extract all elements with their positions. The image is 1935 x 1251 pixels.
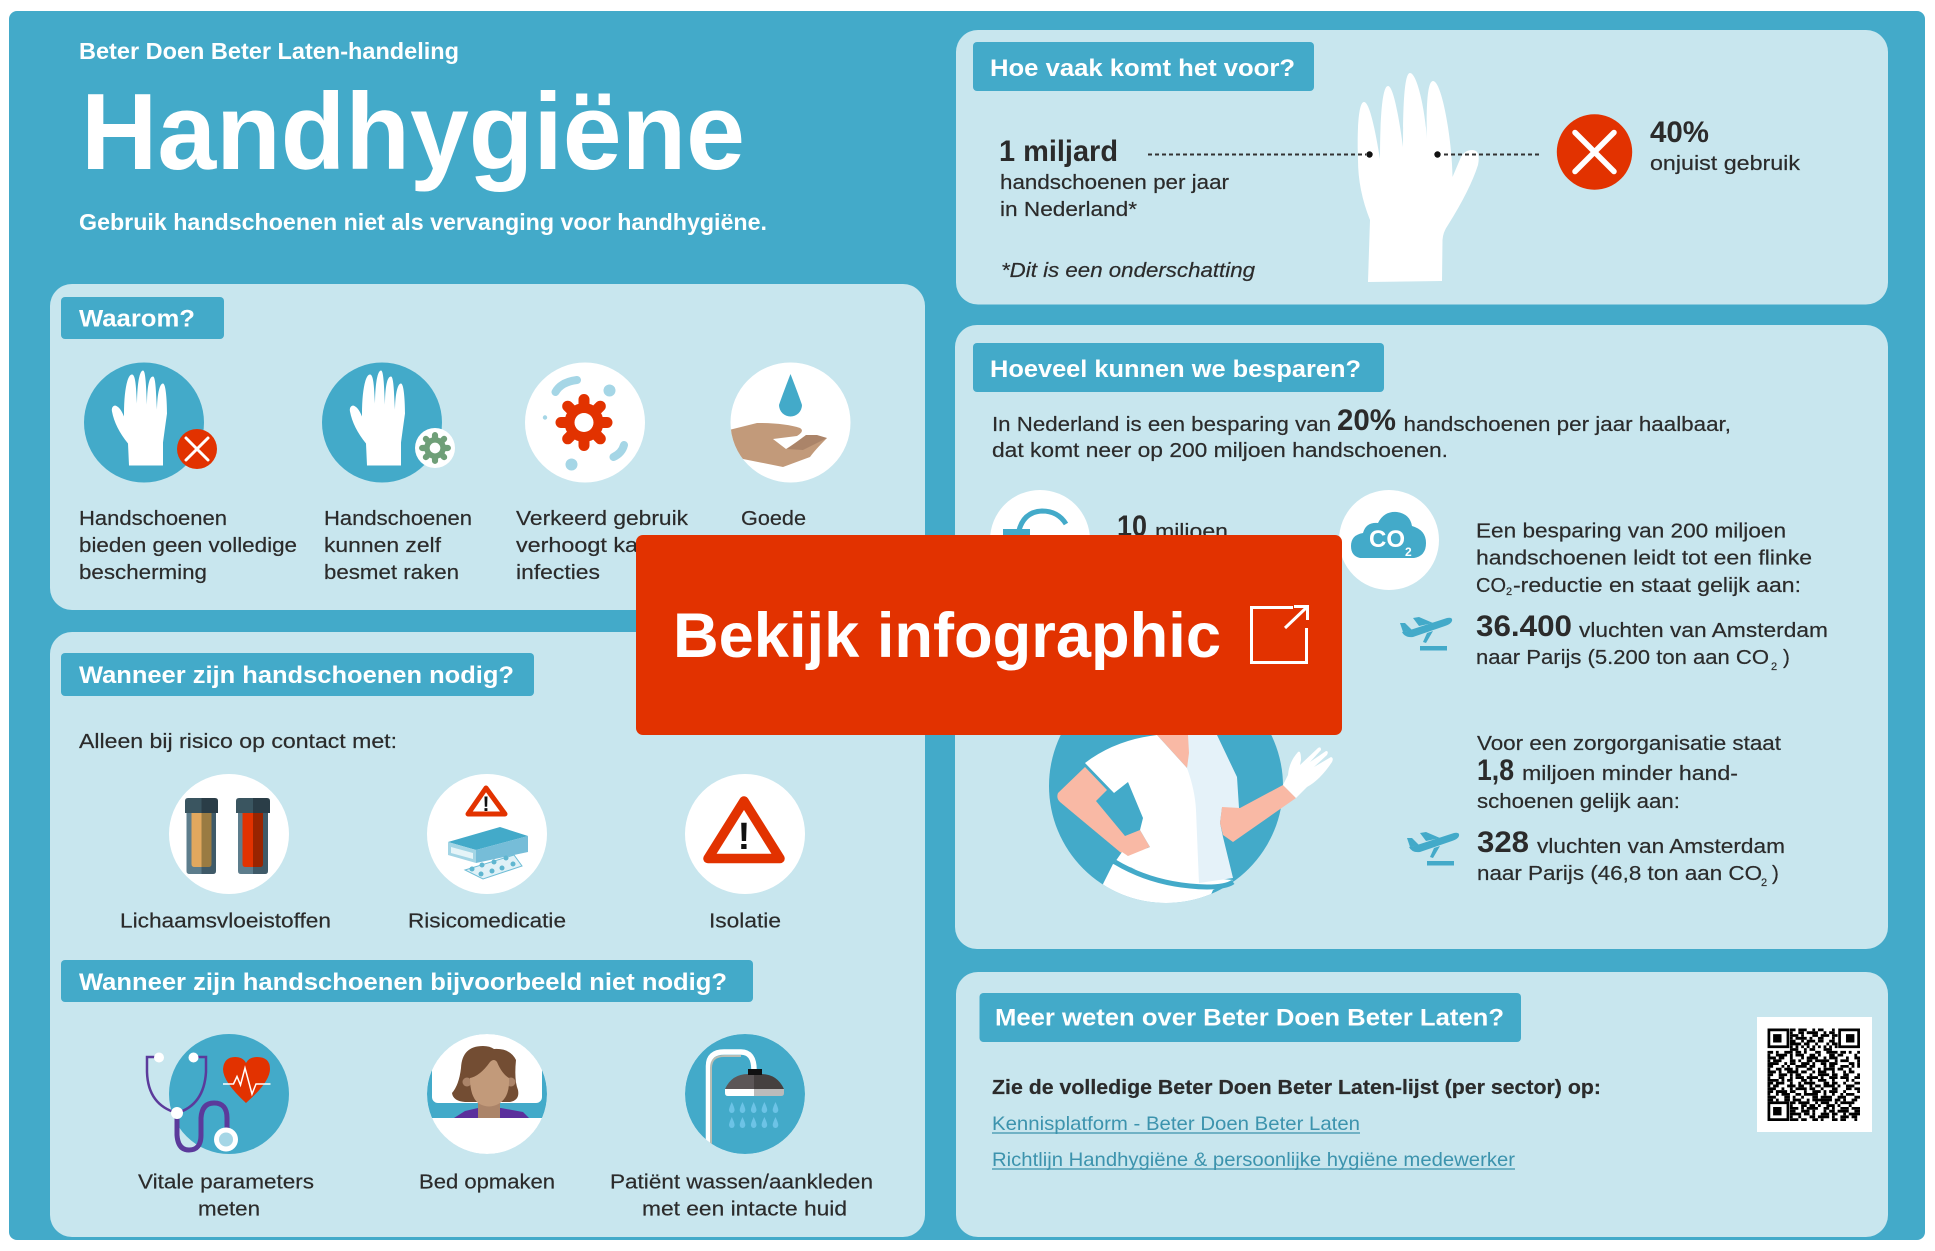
text: column 2: kunnen zelf	[324, 534, 441, 557]
intro text: Alleen bij risico op contact met:	[79, 730, 397, 753]
intro text: In Nederland is een besparing van	[992, 413, 1331, 436]
text: zorgorganisatie	[1477, 732, 1781, 813]
heading: hoeveel: Hoeveel kunnen we besparen?	[990, 356, 1361, 383]
qr code	[1757, 1017, 1872, 1132]
icon: body fluids	[169, 774, 289, 894]
stat: 36.400 flights: 2	[1771, 661, 1777, 673]
stat: 40%	[1650, 116, 1801, 175]
stat: 10 miljoen: miljoen	[1155, 520, 1228, 543]
nurse glove	[1283, 747, 1333, 798]
icon: co2 cloud: 2	[1405, 545, 1412, 559]
stat: 328 flights	[1477, 826, 1785, 889]
heading: hoe vaak	[973, 42, 1314, 91]
intro text: dat komt neer op 200 miljoen handschoenen.	[992, 439, 1448, 462]
text: column 3: infecties	[516, 561, 600, 584]
icon: co2 cloud	[1339, 490, 1439, 590]
icon: water drop and hand	[725, 362, 850, 482]
text: co2 reduction: 2	[1506, 586, 1512, 598]
text: column 1: bescherming	[79, 561, 207, 584]
icon: risk medication	[427, 774, 547, 894]
stat: 40%: 40%	[1650, 116, 1709, 149]
icon: glove with germ	[322, 362, 455, 482]
labels: risk contacts: Risicomedicatie	[408, 910, 566, 932]
text: column 3: verhoogt ka	[516, 534, 639, 557]
icon: co2 cloud: CO	[1369, 526, 1405, 553]
stat: 36.400 flights: vluchten van Amsterdam	[1579, 619, 1828, 642]
labels: not needed: Vitale parameters	[138, 1170, 314, 1194]
heading: hoeveel	[973, 343, 1384, 392]
connector: dotted lines	[1148, 151, 1542, 158]
icon: recycle circle	[990, 490, 1090, 590]
stat: 10 miljoen	[1117, 510, 1228, 543]
intro text: handschoenen per jaar haalbaar,	[1404, 413, 1731, 436]
subtitle: Gebruik handschoenen niet als vervanging voor handhygiëne.	[79, 209, 767, 235]
labels: not needed	[138, 1170, 873, 1220]
nurse lower coat	[1103, 864, 1233, 903]
heading: waarom: Waarom?	[79, 306, 195, 332]
panel: hoeveel	[955, 325, 1888, 949]
icon: large glove	[1358, 73, 1479, 282]
text: zorgorganisatie: 1,8	[1477, 754, 1514, 787]
text: co2 reduction: CO	[1476, 574, 1506, 597]
nurse belt	[1115, 862, 1233, 887]
stat: 36.400 flights: 36.400	[1476, 610, 1572, 643]
heading: wanneer niet nodig: Wanneer zijn handschoenen bijvoorbeeld niet nodig?	[79, 969, 727, 996]
stat: 10 miljoen: 10	[1117, 510, 1147, 543]
nurse disc	[1049, 669, 1283, 903]
icon: red cross	[1557, 114, 1632, 190]
text: column 3	[516, 507, 689, 584]
text: column 2	[324, 507, 472, 584]
heading: wanneer nodig: Wanneer zijn handschoenen nodig?	[79, 662, 514, 689]
stat: 1 miljard: in Nederland*	[1000, 198, 1137, 221]
icon: external link	[1252, 606, 1308, 662]
stat: 40%: onjuist gebruik	[1650, 152, 1801, 175]
nurse left arm	[1057, 767, 1150, 860]
icon: stethoscope and heart	[147, 1034, 289, 1154]
text: column 1: Handschoenen	[79, 507, 227, 530]
text: zorgorganisatie: miljoen minder hand-	[1522, 762, 1738, 785]
icon: isolation warning	[685, 774, 805, 894]
icon: shower	[685, 1034, 805, 1160]
heading: hoe vaak: Hoe vaak komt het voor?	[990, 55, 1295, 82]
intro text	[992, 404, 1731, 462]
nurse illustration	[1049, 735, 1333, 903]
icon: risk medication: !	[482, 793, 490, 816]
heading: meer weten	[980, 993, 1521, 1042]
stat: 36.400 flights	[1476, 610, 1828, 673]
stat: 36.400 flights: naar Parijs (5.200 ton aan CO	[1476, 646, 1769, 669]
heading: wanneer niet nodig	[61, 960, 753, 1002]
stat: 1 miljard: handschoenen per jaar	[1000, 171, 1229, 194]
header	[79, 38, 767, 235]
heading: wanneer nodig	[61, 653, 534, 696]
nurse right coat panel	[1187, 735, 1239, 883]
link 1: Kennisplatform - Beter Doen Beter Laten	[992, 1113, 1360, 1135]
text: co2 reduction: handschoenen leidt tot een flinke	[1476, 546, 1812, 570]
text: column 4: Goede	[741, 507, 806, 530]
bold line: Zie de volledige Beter Doen Beter Laten-lijst (per sector) op:	[992, 1076, 1601, 1099]
stat: 328 flights: 328	[1477, 826, 1529, 859]
text: column 2: Handschoenen	[324, 507, 472, 530]
text: column 2: besmet raken	[324, 561, 459, 584]
text: co2 reduction: Een besparing van 200 miljoen	[1476, 520, 1786, 542]
icon: germ	[525, 362, 645, 482]
labels: not needed: meten	[198, 1198, 260, 1220]
nurse right arm	[1220, 785, 1296, 842]
panel: meer weten	[956, 972, 1888, 1237]
stat: 328 flights: 2	[1761, 877, 1767, 889]
stat: 36.400 flights: )	[1783, 646, 1790, 669]
stat: 328 flights: )	[1772, 862, 1779, 885]
intro text: 20%	[1337, 404, 1396, 437]
text: column 3: Verkeerd gebruik	[516, 507, 689, 530]
link 2: Richtlijn Handhygiëne & persoonlijke hygiëne medewerker	[992, 1149, 1516, 1171]
icon: bed	[427, 1034, 547, 1154]
text: column 1: bieden geen volledige	[79, 534, 297, 557]
heading: waarom	[61, 297, 224, 339]
labels: risk contacts: Lichaamsvloeistoffen	[120, 910, 331, 932]
kicker: Beter Doen Beter Laten-handeling	[79, 38, 459, 64]
text: co2 reduction	[1476, 520, 1812, 598]
footnote: *Dit is een onderschatting	[1001, 259, 1256, 282]
icon: plane 2	[1407, 832, 1459, 866]
panel: waarom	[50, 284, 925, 610]
stat: 328 flights: naar Parijs (46,8 ton aan CO	[1477, 862, 1762, 885]
panel: wanneer	[50, 632, 925, 1237]
labels: not needed: Bed opmaken	[419, 1170, 555, 1194]
labels: not needed: Patiënt wassen/aankleden	[610, 1170, 873, 1194]
nurse coat	[1085, 735, 1199, 884]
text: zorgorganisatie: Voor een zorgorganisatie staat	[1477, 732, 1781, 755]
text: column 1	[79, 507, 297, 584]
stat: 328 flights: vluchten van Amsterdam	[1537, 835, 1785, 858]
nurse neck	[1157, 735, 1189, 768]
icon: isolation warning: !	[738, 816, 750, 858]
stat: 1 miljard: 1 miljard	[999, 135, 1118, 168]
labels: risk contacts	[120, 910, 781, 932]
panel: hoe vaak	[956, 30, 1888, 304]
button label: Bekijk infographic	[673, 601, 1221, 671]
text: zorgorganisatie: schoenen gelijk aan:	[1477, 790, 1680, 813]
labels: risk contacts: Isolatie	[709, 910, 781, 932]
icon: glove with red cross	[84, 362, 217, 482]
labels: not needed: met een intacte huid	[642, 1198, 847, 1220]
button: bekijk infographic	[636, 535, 1342, 735]
icon: plane 1	[1400, 617, 1452, 650]
text: co2 reduction: -reductie en staat gelijk aan:	[1513, 574, 1801, 597]
stat: 1 miljard	[999, 135, 1229, 221]
heading: meer weten: Meer weten over Beter Doen Beter Laten?	[995, 1004, 1504, 1032]
title: Handhygiëne	[81, 71, 745, 193]
